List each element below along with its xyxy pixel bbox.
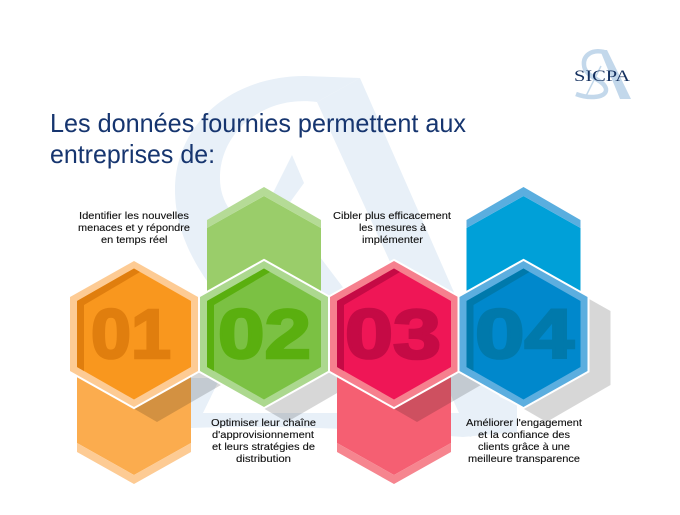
text block 01: en temps réel <box>101 234 168 246</box>
text block 04: meilleure transparence <box>468 453 580 465</box>
step 01 hexagon <box>70 261 221 484</box>
text block 03 <box>333 210 451 246</box>
title <box>50 108 466 169</box>
text block 03: Cibler plus efficacement <box>333 210 451 222</box>
number 02: 02 <box>218 295 311 373</box>
text block 02: distribution <box>236 453 291 465</box>
text block 04: et la confiance des <box>478 429 570 441</box>
lower extension 03 <box>337 376 451 484</box>
text block 04: Améliorer l'engagement <box>466 417 582 429</box>
SICPA logo: SICPA <box>574 68 631 85</box>
step 03 hexagon <box>330 261 481 484</box>
text block 02 <box>211 417 316 465</box>
step 04 hexagon <box>460 187 610 422</box>
SICPA logo <box>574 50 631 99</box>
step 02 hexagon <box>200 187 351 422</box>
text block 02: d'approvisionnement <box>212 429 314 441</box>
lower extension 01 <box>77 376 191 484</box>
text block 02: Optimiser leur chaîne <box>211 417 316 429</box>
text block 04 <box>466 417 582 465</box>
text block 01 <box>78 210 190 246</box>
number 03: 03 <box>345 295 441 373</box>
background watermark monogram <box>175 76 517 437</box>
text block 01: menaces et y répondre <box>78 222 190 234</box>
text block 04: clients grâce à une <box>478 441 570 453</box>
title: Les données fournies permettent aux <box>50 108 466 138</box>
upper extension 04 <box>466 187 580 292</box>
text block 03: les mesures à <box>359 222 426 234</box>
text block 02: et leurs stratégies de <box>212 441 315 453</box>
title: entreprises de: <box>50 139 215 169</box>
text block 01: Identifier les nouvelles <box>79 210 189 222</box>
text block 03: implémenter <box>362 234 424 246</box>
upper extension 02 <box>207 187 321 292</box>
number 04: 04 <box>475 295 574 373</box>
number 01: 01 <box>91 295 171 373</box>
